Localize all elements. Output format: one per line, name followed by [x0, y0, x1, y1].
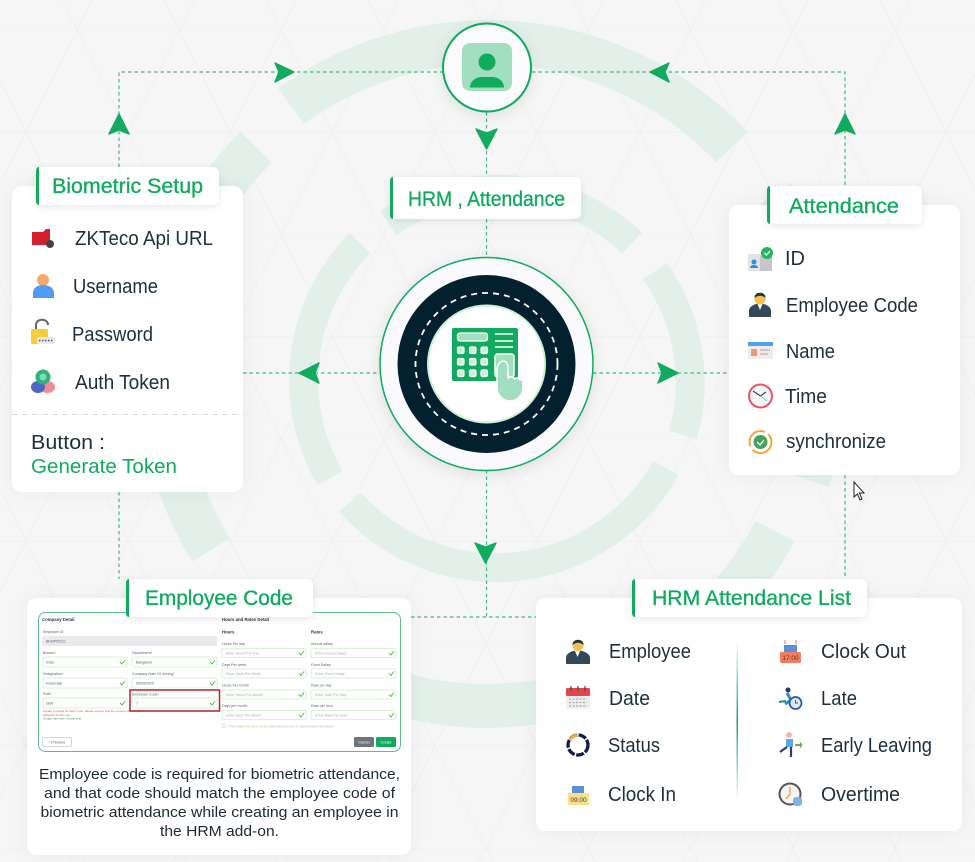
arrow: up from attendance — [835, 114, 855, 134]
label: Early Leaving: Early Leaving — [821, 735, 932, 757]
label: Clock Out: Clock Out — [821, 641, 906, 663]
icon: overtime — [780, 784, 802, 806]
form screenshot: 05/28/2025 — [136, 682, 154, 686]
icon: keypad with finger — [452, 328, 523, 401]
label: Clock In: Clock In — [608, 784, 676, 806]
form screenshot — [38, 612, 400, 752]
highlighted employee code field: 7 — [136, 702, 138, 706]
icon: status ring — [568, 735, 588, 755]
form screenshot: Enter Fixed Salary — [315, 672, 345, 676]
connector lines — [119, 72, 845, 617]
icon: name card — [748, 342, 773, 359]
icon: date — [566, 686, 590, 709]
form screenshot: Create — [381, 740, 391, 744]
form screenshot: Enter Rate Per Day — [315, 693, 346, 697]
form screenshot: India — [46, 660, 54, 664]
label: ZKTeco Api URL: ZKTeco Api URL — [75, 228, 213, 250]
label: ID: ID — [785, 248, 805, 270]
icon: clock — [749, 384, 772, 408]
icon: clock in: 09:00 — [570, 797, 587, 804]
heading: Attendance — [767, 186, 922, 224]
form screenshot: Company Detail — [42, 617, 74, 622]
description: Employee code is required for biometric attendance, — [39, 767, 400, 783]
arrow: down to HRM — [476, 129, 497, 149]
heading: Employee Code — [126, 579, 313, 617]
heading: HRM Attendance List — [632, 579, 867, 617]
form screenshot: Rates — [311, 630, 323, 634]
form screenshot: Enter Hours Per Day — [226, 652, 259, 656]
label: Auth Token: Auth Token — [75, 372, 170, 394]
form screenshot: Designation* — [43, 672, 64, 676]
icon: password lock — [31, 320, 55, 344]
form screenshot: Rate per day — [311, 684, 332, 688]
form screenshot: Hours Per day — [222, 642, 245, 646]
form screenshot: Role* — [43, 692, 52, 696]
label: Generate Token: Generate Token — [31, 456, 177, 478]
icon: employee — [566, 640, 590, 664]
icon: id card — [748, 247, 773, 271]
background rings — [161, 42, 826, 706]
cursor — [854, 482, 864, 500]
user node — [443, 24, 531, 112]
form screenshot: Financials — [46, 682, 62, 686]
label: Button: Button : — [31, 432, 105, 454]
label: Overtime: Overtime — [821, 784, 900, 806]
form screenshot: Enter Days Per Month — [226, 714, 261, 718]
icon: user — [462, 43, 512, 91]
panel: biometric setup — [12, 167, 243, 492]
form screenshot: Days per month — [222, 704, 247, 708]
form screenshot: Employee ID — [43, 630, 64, 634]
form screenshot: Company Date Of Joining* — [132, 672, 175, 676]
form screenshot: Cancel — [358, 740, 370, 744]
arrow: top left — [275, 63, 294, 82]
description: the HRM add-on. — [160, 824, 279, 840]
form screenshot: Enter Hours Per Month — [226, 693, 263, 697]
arrow: top right — [650, 63, 669, 82]
form screenshot: Branch* — [43, 651, 56, 655]
panel: attendance — [729, 186, 960, 475]
icon: clock out: 17:00 — [782, 655, 799, 662]
form screenshot: Hours and Rates Detail — [222, 617, 269, 622]
icon: employee — [749, 293, 771, 317]
description: biometric attendance while creating an employee in — [40, 805, 398, 821]
icon: clock in — [568, 786, 589, 805]
heading: Biometric Setup — [36, 167, 219, 205]
icon: clock out — [780, 640, 801, 663]
heading: Employee Code: Employee Code — [145, 587, 293, 610]
form screenshot: Days Per week — [222, 663, 246, 667]
form screenshot: Create role here. Create role — [43, 716, 82, 720]
heading: HRM Attendance: HRM , Attendance — [408, 188, 565, 211]
icon: api folder — [32, 229, 54, 248]
form screenshot: This employee need not be paid unless hours or days worked are added — [228, 724, 334, 728]
label: Status: Status — [608, 735, 660, 757]
form screenshot: Enter Days Per Week — [226, 672, 261, 676]
description — [39, 767, 400, 840]
arrow: left to biometric — [299, 363, 319, 383]
icon: auth token — [31, 370, 55, 393]
heading: Biometric Setup: Biometric Setup — [52, 175, 203, 198]
arrow: right to attendance — [658, 363, 678, 383]
form screenshot: Annual salary — [311, 642, 333, 646]
heading: Attendance: Attendance — [789, 195, 899, 218]
form screenshot: Enter Rate Per Hour — [315, 714, 348, 718]
form screenshot: Bangalore — [136, 660, 152, 664]
form screenshot: Create a results for user's role. Please ensure that the correct role has been — [43, 709, 144, 713]
form screenshot: Enter Annual Salary — [315, 652, 347, 656]
panel: employee code — [27, 579, 411, 855]
label: Password: Password — [72, 324, 153, 346]
label: Late: Late — [821, 688, 857, 710]
label: synchronize: synchronize — [786, 431, 886, 453]
form screenshot: Hours — [222, 630, 235, 634]
label: Name: Name — [786, 341, 835, 363]
form screenshot: staff — [46, 702, 53, 706]
arrow: up to biometric — [109, 114, 129, 134]
label: Username: Username — [73, 276, 158, 298]
form screenshot: BEMP00011 — [46, 640, 66, 644]
central biometric device — [380, 258, 593, 470]
icon: late — [779, 688, 802, 709]
form screenshot: Fixed Salary — [311, 663, 331, 667]
form screenshot: ‹ Previous — [49, 740, 65, 744]
arrow: down to bottom — [475, 543, 496, 563]
form screenshot: assigned to this user. — [43, 713, 71, 717]
panel: HRM attendance list — [536, 579, 962, 831]
icon: early leaving — [780, 732, 802, 757]
label: Date: Date — [609, 688, 650, 710]
highlighted employee code field — [130, 690, 220, 711]
form screenshot: Rate per hour — [311, 704, 334, 708]
highlighted employee code field: Employee Code* — [132, 692, 160, 696]
label: Time: Time — [785, 386, 827, 408]
description: and that code should match the employee code of — [44, 786, 396, 802]
icon: synchronize — [750, 431, 772, 453]
label: Employee: Employee — [609, 641, 691, 663]
form screenshot: Department* — [132, 651, 153, 655]
heading: HRM Attendance — [390, 177, 581, 219]
heading: HRM Attendance List: HRM Attendance List — [652, 587, 851, 610]
form screenshot: Hours Per month — [222, 684, 249, 688]
icon: username — [33, 274, 54, 298]
label: Employee Code: Employee Code — [786, 295, 918, 317]
